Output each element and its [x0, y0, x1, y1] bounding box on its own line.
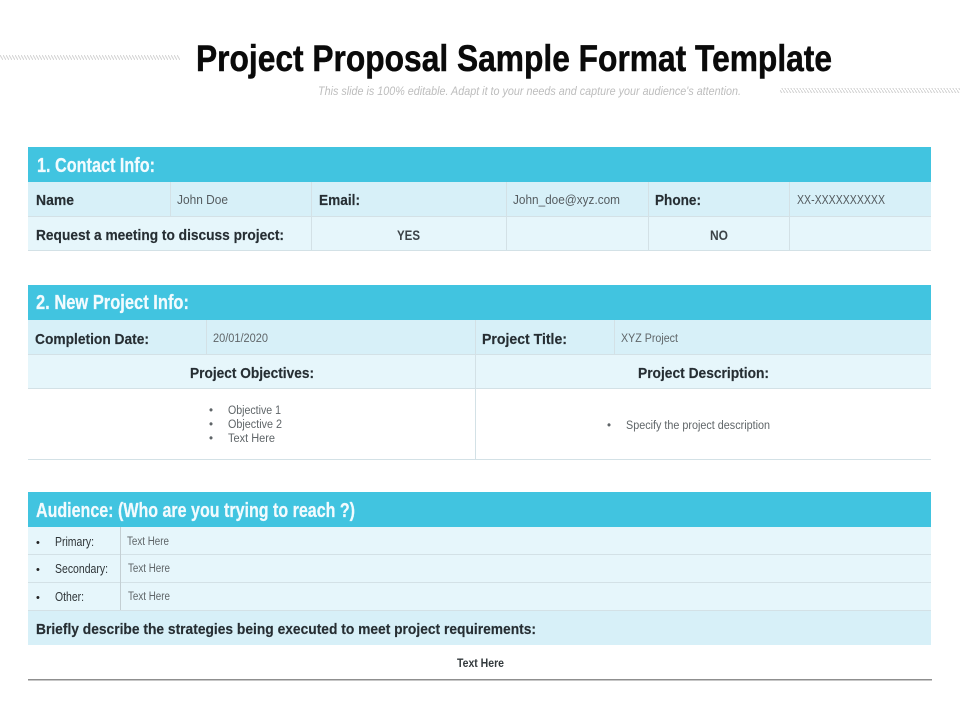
subtitle: This slide is 100% editable. Adapt it to your needs and capture your audience's attention.: [318, 84, 741, 98]
row: other: Other:: [55, 590, 84, 604]
value: name: John Doe: [177, 192, 228, 207]
list: objectives: •: [209, 405, 213, 417]
heading: contact info: [28, 147, 931, 182]
list: objectives: Text Here: [228, 433, 275, 445]
list: description: •: [607, 420, 611, 432]
label: completion date: Completion Date:: [35, 331, 149, 348]
row: secondary: •: [36, 564, 40, 576]
label: project title: Project Title:: [482, 331, 567, 348]
heading: audience: [28, 492, 931, 527]
label: email: Email:: [319, 192, 360, 209]
list: objectives: Objective 2: [228, 419, 282, 431]
panel: contact info: [28, 147, 931, 251]
row: secondary: Text Here: [128, 563, 170, 575]
label: project objectives: Project Objectives:: [190, 365, 314, 382]
label: request a meeting: Request a meeting to discuss project:: [36, 227, 284, 244]
list: objectives: [209, 405, 282, 445]
value: project title: XYZ Project: [621, 333, 679, 345]
heading: new project info: 2. New Project Info:: [36, 292, 189, 314]
value: completion date: 20/01/2020: [213, 333, 268, 345]
list: description: Specify the project description: [626, 420, 770, 432]
heading: audience: Audience: (Who are you trying to reach ?): [36, 500, 355, 522]
heading: new project info: [28, 285, 931, 320]
option: yes: YES: [397, 228, 420, 243]
row: primary: [36, 535, 169, 549]
list: objectives: •: [209, 433, 213, 445]
label: name: Name: [36, 192, 74, 209]
row: other: [36, 590, 170, 604]
list: objectives: •: [209, 419, 213, 431]
decorative hatched strip: left: [0, 55, 180, 60]
title: Project Proposal Sample Format Template: [196, 38, 832, 79]
heading: contact info: 1. Contact Info:: [37, 155, 155, 177]
row: primary: Primary:: [55, 535, 94, 549]
panel: audience: [28, 492, 932, 680]
row: secondary: Secondary:: [55, 562, 108, 576]
label: strategies: Briefly describe the strategies being executed to meet project requirements:: [36, 621, 536, 638]
row: primary: •: [36, 537, 40, 549]
option: no: NO: [710, 228, 728, 243]
row: secondary: [36, 562, 170, 576]
panel: new project info: [28, 285, 931, 460]
value: phone: XX-XXXXXXXXXX: [797, 192, 885, 207]
row: other: •: [36, 592, 40, 604]
label: project description: Project Description:: [638, 365, 769, 382]
decorative hatched strip: right: [780, 88, 960, 93]
label: phone: Phone:: [655, 192, 701, 209]
value: strategies: Text Here: [457, 656, 504, 670]
row: other: Text Here: [128, 591, 170, 603]
bottom rule: [28, 679, 932, 680]
value: email: John_doe@xyz.com: [513, 192, 620, 207]
list: objectives: Objective 1: [228, 405, 281, 417]
row: primary: Text Here: [127, 536, 169, 548]
